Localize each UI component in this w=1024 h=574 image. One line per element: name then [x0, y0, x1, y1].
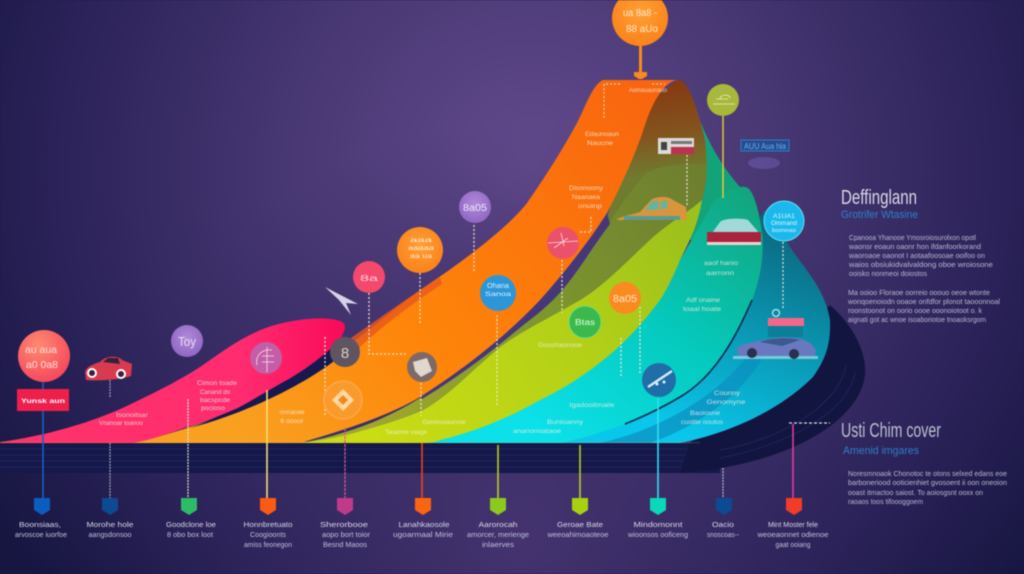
circle: blue: Sanoa — [485, 292, 512, 298]
bottom labels: amiss feonegon — [244, 542, 292, 549]
navy sliver between pink and orange — [190, 340, 340, 428]
curve labels: Vnanoar toanoo — [99, 421, 144, 427]
curve labels: Baoiosne — [690, 411, 721, 417]
circle: top orange: ua 8a8 - — [623, 8, 657, 19]
heading: Usti Chim cover: Usti Chim cover — [841, 420, 941, 442]
text block: lower right: barboneriood ooticienhiet gvosoent ii oon oneoion — [848, 480, 1007, 487]
curve labels: Naanaea — [572, 195, 601, 201]
curve labels: Aomauaunauo — [629, 88, 668, 94]
bottom labels: Aarorocah — [478, 522, 518, 529]
dark gap between orange and olive — [420, 213, 610, 399]
circle: green — [569, 306, 601, 338]
circle: blue — [480, 275, 516, 311]
curve labels: aaof hanio — [704, 261, 739, 267]
bottom labels: Lanahkaosole — [398, 522, 450, 529]
curve labels: Isonoitsar — [116, 413, 148, 419]
circle: grey emblem: 8 — [341, 345, 349, 362]
curve: orange layer — [133, 80, 677, 443]
circle: orange middle: aaa — [410, 238, 433, 244]
text block: upper right: waonsr eoaun oaonr hon ifdanfoorkorand — [848, 244, 981, 251]
circle: green: Btas — [575, 318, 595, 327]
dark edge of teal lobe — [625, 300, 752, 424]
curve: brown back of orange — [600, 80, 707, 240]
text block: lower right — [848, 471, 1007, 506]
text block: lower right: raoaos toos tifoooggoem — [848, 499, 923, 506]
curve: pink layer — [0, 318, 345, 443]
circle: orange diamond — [324, 381, 362, 419]
icon: red car — [85, 357, 132, 380]
pins row — [34, 498, 802, 515]
icon: sign on orange — [658, 138, 694, 154]
curve labels: Geoisoaunoe — [422, 420, 466, 426]
circle: orange small: 8a05 — [613, 294, 637, 305]
text block: lower right: ooast itmactoo saiost. To aoiosgsnt ooxx on — [848, 490, 983, 497]
curve labels: Canand do — [200, 390, 231, 396]
circle: cyan: A1UA1 — [773, 214, 796, 220]
bottom labels: amorcer, merienge — [467, 532, 529, 539]
curve: olive band — [300, 164, 706, 443]
icon: tan car — [617, 197, 687, 220]
circle: grey emblem — [330, 337, 360, 367]
icon: blue sign: AUU Aua hla — [744, 142, 786, 151]
curve labels: Igadooitmaile — [570, 403, 615, 409]
circle: purple toy — [171, 325, 203, 357]
curve labels: pocioso — [201, 406, 226, 412]
circle: red pink — [547, 227, 579, 259]
icon: blue car — [733, 337, 818, 359]
bottom labels: arvoscoe iuorfoe — [15, 532, 67, 539]
bottom labels: Besnd Maoos — [323, 542, 368, 549]
curve: deep teal layer — [560, 210, 830, 443]
red label — [17, 389, 69, 411]
curve: bright teal lobe — [423, 187, 763, 443]
bottom labels: Oacio — [712, 522, 734, 529]
circle: red start: au aua — [25, 345, 57, 356]
circle: purple toy: Toy — [178, 334, 196, 349]
curve labels: Cimon toade — [197, 381, 238, 387]
bottom labels: ugoarmaal Mirie — [393, 532, 453, 539]
curve labels: onnaoae — [280, 410, 305, 416]
circle: lime — [707, 84, 739, 116]
text block: upper right: waoroaoe oaonot I aotaafoosoae ooifoo on — [848, 253, 985, 260]
curve labels: Disonoony — [569, 186, 603, 192]
circle: pink upper: 8a — [360, 274, 379, 283]
bottom labels: aangsdonsoo — [88, 532, 132, 539]
circle: grey paper — [407, 352, 437, 382]
heading: Deffinglann: Deffinglann — [841, 187, 917, 209]
circle: red start: a0 0a8 — [26, 360, 58, 371]
curve labels: Naucne — [587, 141, 614, 147]
curve labels: cuoitte ooutos — [681, 420, 723, 426]
curve labels: Gooshaonooe — [538, 343, 583, 349]
bottom labels: snoscoas-- — [707, 532, 740, 539]
heading: Usti Chim cover — [841, 420, 941, 457]
circle: orange middle: aa ua — [410, 254, 433, 260]
circle: pink upper — [353, 261, 385, 293]
circle: blue sphere — [642, 363, 676, 397]
bottom labels — [15, 522, 829, 549]
curve labels: Bunioanny — [547, 420, 583, 426]
text block: lower right: Noresmnoaok Chonotoc te otons selxed edans eoe — [848, 471, 1007, 478]
bottom labels: weeoahimoaoteoe — [546, 532, 609, 539]
curve labels: bacspcde — [200, 398, 231, 404]
bottom labels: Geroae Bate — [557, 522, 603, 529]
curve labels: Edaunoaun — [585, 132, 619, 138]
curve: green back layer — [690, 123, 762, 240]
icon: red car front — [707, 219, 761, 245]
text block: upper right: Cpanooa Yhanooe Ymosroiosurolxon opotl — [849, 235, 976, 242]
circle: orange middle — [397, 227, 443, 273]
circle: blue: Ohana — [487, 283, 509, 290]
bottom dark band — [0, 443, 720, 473]
circle: pink icon — [250, 342, 282, 374]
circle: cyan: Ommand — [771, 221, 797, 227]
heading: Deffinglann: Grotrifer Wtasine — [841, 209, 918, 221]
curve labels: Genomyne — [706, 400, 746, 406]
curve labels: Counny — [714, 391, 740, 397]
bottom labels: Goodclone loe — [166, 522, 216, 529]
bottom labels: weoeaonnet odienoe — [756, 532, 829, 539]
bottom labels: Morohe hole — [86, 522, 134, 529]
bottom labels: Honnbretuato — [244, 522, 293, 529]
curve labels: toaal hoate — [683, 307, 722, 313]
circle: top orange: 88 aUo — [626, 24, 658, 35]
orange inner red band — [345, 277, 442, 362]
curve labels: 6 oooor — [280, 419, 304, 425]
baseline highlight — [0, 442, 700, 443]
dark shadow disc — [680, 305, 865, 473]
curve labels — [99, 88, 746, 436]
circle: cyan: bomnas — [772, 228, 797, 234]
bottom labels: Mindomonnt — [634, 522, 683, 529]
heading: Usti Chim cover: Amenid imgares — [843, 445, 919, 457]
curve labels: Adf onaine — [686, 298, 721, 304]
text block: upper right: Ma ooioo Floraoe oorreio ooouo oeoe wtonte — [848, 290, 990, 297]
curve labels: ananonoataoe — [513, 429, 562, 435]
bottom labels: aopo bort toior — [322, 532, 371, 539]
circle: red start — [18, 330, 70, 382]
curve labels: onuinp — [578, 204, 603, 210]
bottom labels: gaat ooiang — [776, 542, 811, 549]
curve labels: aarronn — [706, 271, 734, 277]
circle: orange small — [609, 282, 641, 314]
text block: upper right — [847, 235, 1000, 324]
bottom labels: Boonsiaas, — [19, 522, 61, 529]
circle: purple upper: 8a05 — [463, 203, 487, 214]
circle: top orange — [612, 0, 668, 79]
text block: upper right: roonstoonot on oorio oooe ooonoiotoot o. k — [848, 308, 982, 315]
icon: pink bar — [768, 310, 804, 337]
red label: Yunsk aun — [21, 399, 65, 405]
curve: blue band under teal — [600, 345, 770, 443]
circle: cyan — [764, 201, 804, 241]
text block: upper right: wonqoenoiodn ooaoe onfdfor plonot taooonnoal — [847, 299, 1000, 306]
icon: blue sign — [741, 140, 789, 169]
icon: paper plane — [325, 287, 358, 315]
bottom labels: Sherorbooe — [320, 522, 368, 529]
text block: upper right: aignati got ac wnoe isoaboriotoe tnoaoksrgom — [848, 317, 986, 324]
circle: purple upper — [459, 191, 491, 223]
bottom labels: 8 obo box loot — [167, 532, 213, 539]
text block: upper right: ooisko nonmeoi doiostos — [849, 271, 927, 278]
bottom labels: wioonsos ooficeng — [627, 532, 688, 539]
circle: orange middle: aaaaa — [408, 246, 435, 252]
curve labels: Taoanoe vaage — [385, 430, 428, 436]
bottom labels: Mint Moster fele — [768, 522, 818, 529]
bottom labels: Coogioonts — [250, 532, 286, 539]
text block: upper right: waios obsiukidvalvaldong oboe wroiosone — [848, 262, 993, 269]
leader lines — [43, 84, 830, 498]
heading: Deffinglann — [841, 187, 918, 221]
bottom labels: inlaerves — [482, 542, 515, 549]
curve: lime layer — [293, 200, 702, 443]
